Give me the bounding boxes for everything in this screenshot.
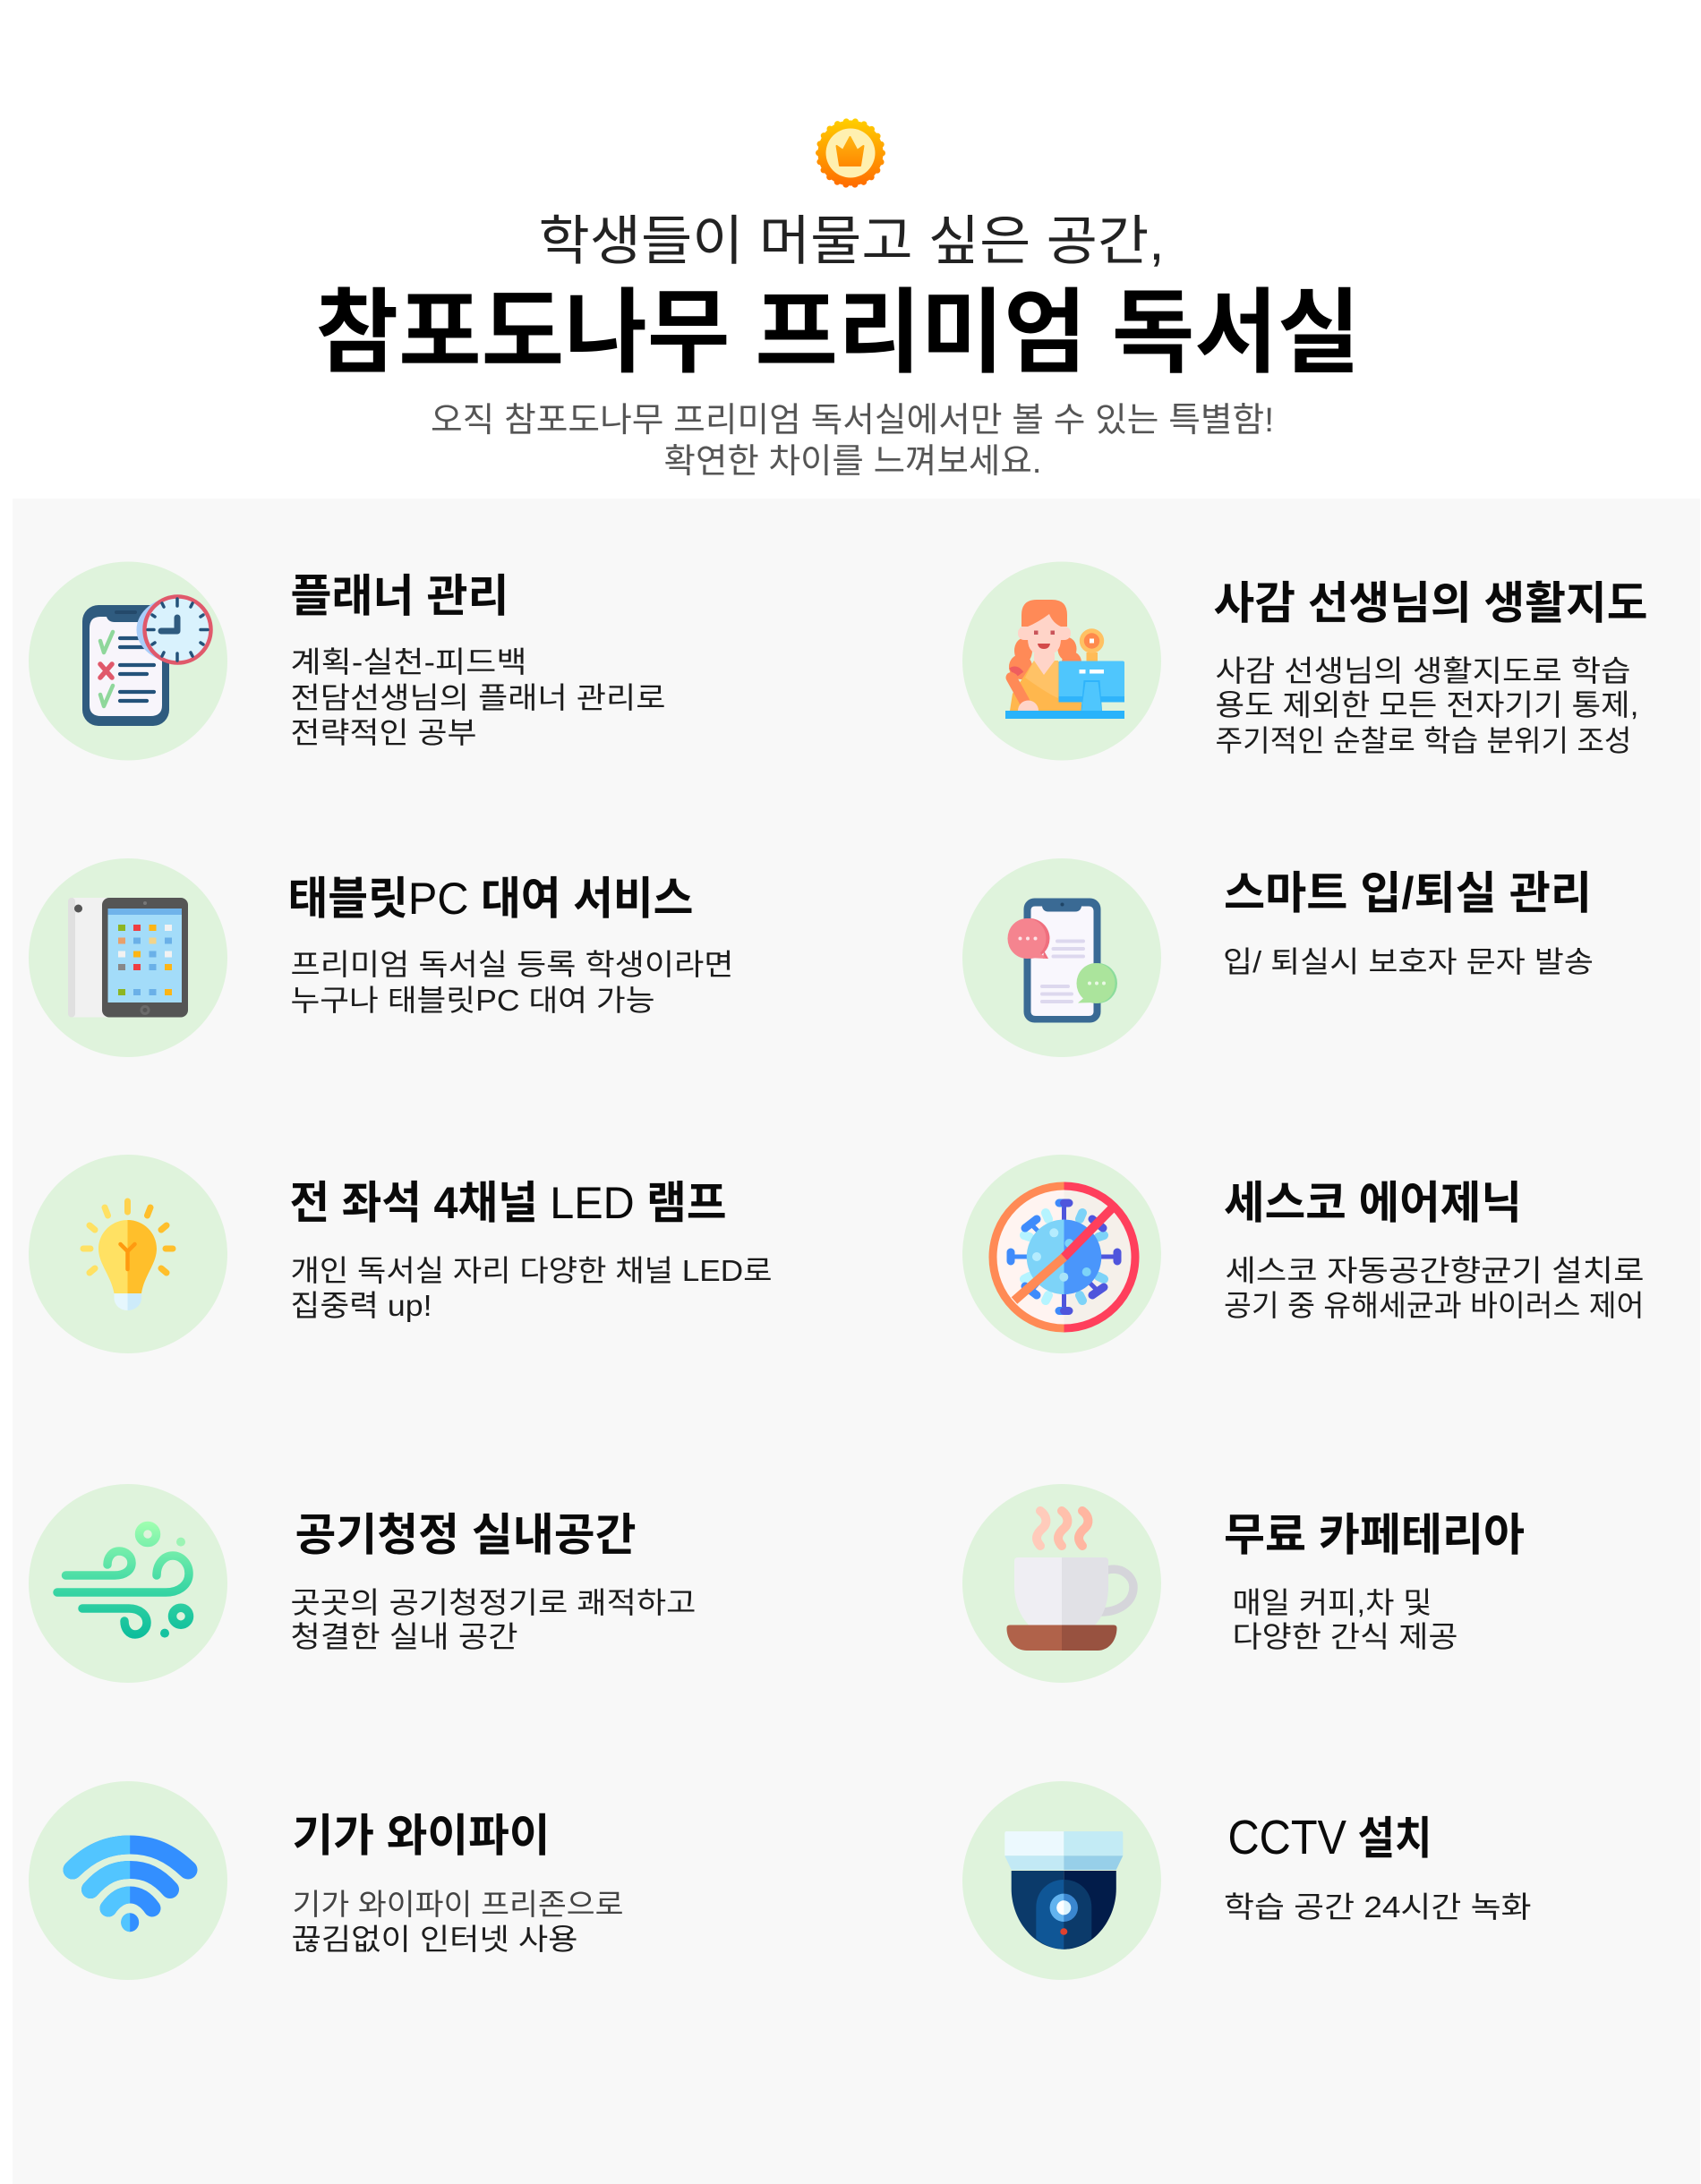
- feature: tablet rental: [29, 858, 734, 1057]
- description: 계획-실천-피드백: [290, 645, 526, 678]
- icon: planner phone with clock: [29, 562, 227, 761]
- intro text: 확연한 차이를 느껴보세요.: [664, 443, 1042, 481]
- feature: air purification: [29, 1484, 697, 1683]
- icon: no virus sign: [962, 1155, 1161, 1353]
- icon: light bulb: [29, 1155, 227, 1353]
- icon: coffee cup: [962, 1484, 1161, 1683]
- heading: 전 좌석 4채널 LED 램프: [290, 1178, 727, 1228]
- panel: features background: [13, 499, 1700, 2184]
- feature: planner: [29, 562, 666, 761]
- feature: teacher guidance: [962, 562, 1647, 761]
- feature: LED lamp: [29, 1155, 772, 1353]
- description: 전담선생님의 플래너 관리로: [290, 681, 666, 714]
- description: 끊김없이 인터넷 사용: [292, 1923, 578, 1956]
- feature: cctv: [962, 1781, 1531, 1980]
- intro text: 오직 참포도나무 프리미엄 독서실에서만 볼 수 있는 특별함!: [431, 402, 1274, 439]
- title: 참포도나무 프리미엄 독서실: [315, 281, 1361, 384]
- feature: giga wifi: [29, 1781, 623, 1980]
- description: 누구나 태블릿PC 대여 가능: [290, 984, 655, 1017]
- icon: wifi: [29, 1781, 227, 1980]
- icon: wind: [29, 1484, 227, 1683]
- description: 기가 와이파이 프리존으로: [292, 1888, 623, 1921]
- description: 개인 독서실 자리 다양한 채널 LED로: [290, 1254, 772, 1287]
- description: 용도 제외한 모든 전자기기 통제,: [1216, 688, 1638, 721]
- icon: phone with chat bubbles: [962, 858, 1161, 1057]
- description: 공기 중 유해세균과 바이러스 제어: [1224, 1289, 1644, 1322]
- description: 입/ 퇴실시 보호자 문자 발송: [1223, 945, 1594, 978]
- feature: cesco air care: [962, 1155, 1644, 1353]
- description: [290, 1254, 772, 1322]
- heading: CCTV 설치: [1228, 1811, 1432, 1864]
- description: [290, 645, 666, 749]
- description: [290, 1586, 697, 1653]
- description: 사감 선생님의 생활지도로 학습: [1216, 654, 1631, 687]
- description: [1216, 654, 1638, 757]
- feature: free cafeteria: [962, 1484, 1525, 1683]
- intro text: [431, 402, 1274, 481]
- subtitle: 학생들이 머물고 싶은 공간,: [539, 211, 1164, 271]
- description: 다양한 간식 제공: [1232, 1620, 1457, 1653]
- description: 매일 커피,차 및: [1232, 1586, 1432, 1619]
- description: 학습 공간 24시간 녹화: [1224, 1890, 1531, 1924]
- heading: 기가 와이파이: [292, 1811, 550, 1861]
- description: 세스코 자동공간향균기 설치로: [1225, 1254, 1644, 1287]
- icon: tablet: [29, 858, 227, 1057]
- heading: 태블릿PC 대여 서비스: [288, 874, 693, 924]
- heading: 사감 선생님의 생활지도: [1214, 578, 1647, 628]
- icon: crown medal: [818, 120, 883, 186]
- description: [1232, 1586, 1457, 1653]
- description: 청결한 실내 공간: [290, 1620, 517, 1653]
- heading: 공기청정 실내공간: [295, 1510, 636, 1560]
- description: 주기적인 순찰로 학습 분위기 조성: [1216, 724, 1631, 757]
- icon: dome camera: [962, 1781, 1161, 1980]
- description: [1224, 1254, 1644, 1322]
- description: [290, 948, 734, 1017]
- heading: 세스코 에어제닉: [1224, 1178, 1522, 1228]
- heading: 스마트 입/퇴실 관리: [1224, 868, 1592, 918]
- icon: teacher at monitor: [962, 562, 1161, 761]
- header: [315, 120, 1361, 481]
- heading: 플래너 관리: [290, 571, 509, 621]
- description: 곳곳의 공기청정기로 쾌적하고: [290, 1586, 697, 1619]
- description: [292, 1888, 623, 1956]
- heading: 무료 카페테리아: [1224, 1510, 1525, 1560]
- description: 전략적인 공부: [290, 716, 476, 749]
- feature: smart entry: [962, 858, 1594, 1057]
- description: 프리미엄 독서실 등록 학생이라면: [290, 948, 734, 981]
- description: 집중력 up!: [290, 1289, 432, 1322]
